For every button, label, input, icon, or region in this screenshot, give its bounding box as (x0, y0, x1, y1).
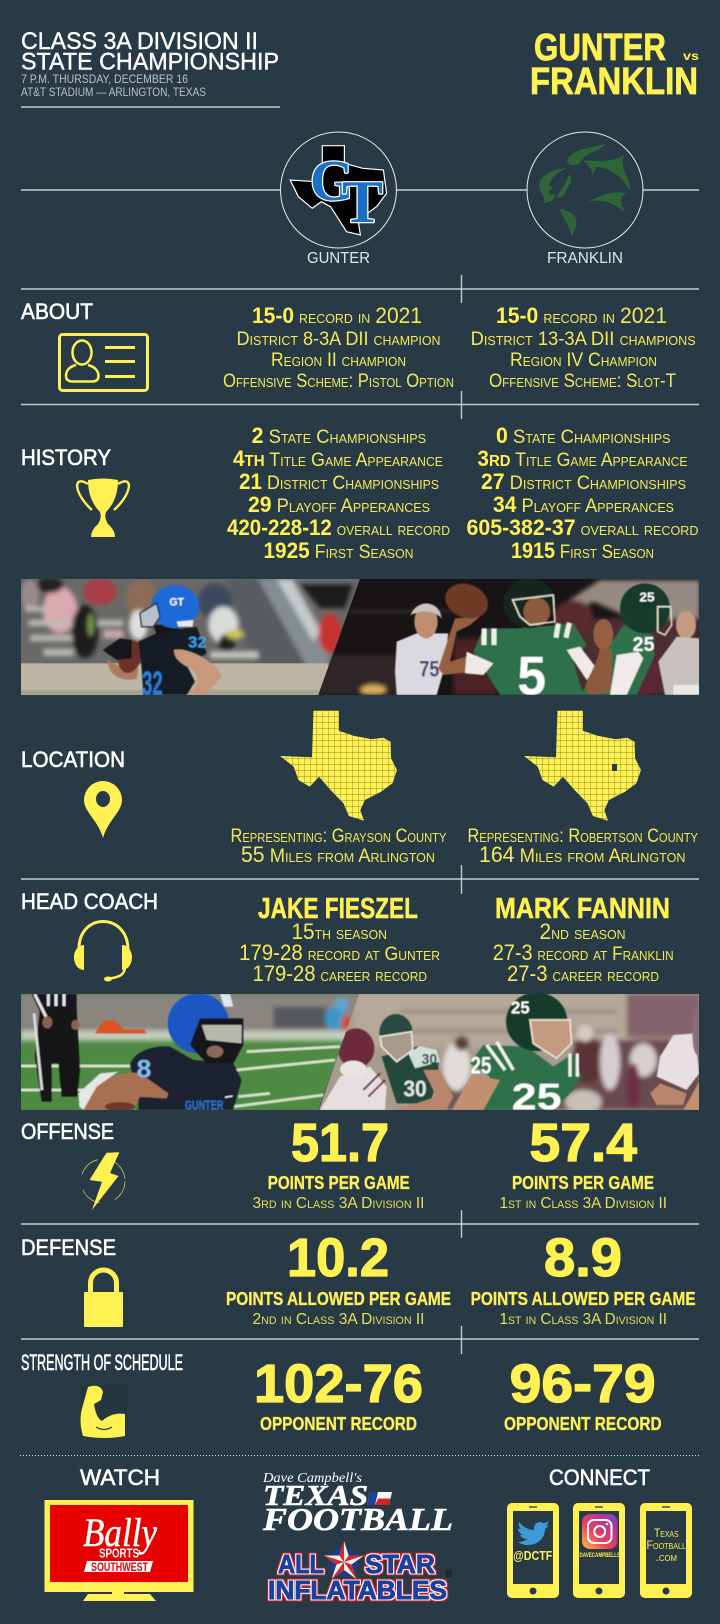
Franklin schedule stats: 96-79 (510, 1354, 656, 1414)
Gunter coach text: 179-28 record at Gunter (239, 940, 440, 965)
panel: strength of schedule (21, 1350, 662, 1438)
Gunter history text: 4TH Title Game Appearance (233, 446, 443, 471)
header: matchup: vs (683, 49, 699, 63)
Franklin offense stats: 1st in Class 3A Division II (500, 1195, 667, 1212)
Franklin coach text: 2nd season (540, 919, 626, 944)
icon: phone with website: .com (656, 1550, 677, 1564)
photo: Gunter receiver: 8 (137, 1055, 151, 1083)
photo: Franklin ball carrier (317, 992, 702, 1117)
Gunter offense stats (252, 1113, 424, 1212)
panel: location (21, 710, 698, 867)
team: Gunter logo: G (310, 148, 354, 213)
Franklin location text (468, 826, 698, 867)
header: matchup: FRANKLIN (530, 61, 698, 103)
Gunter location text: Representing: Grayson County (230, 826, 447, 847)
panel: defense: DEFENSE (21, 1235, 116, 1260)
Gunter defense stats: 2nd in Class 3A Division II (252, 1311, 424, 1328)
logo: Dave Campbell's Texas Football (262, 1471, 453, 1537)
photo: Gunter runner (20, 577, 360, 702)
photo: Gunter runner: 32 (188, 635, 207, 652)
Gunter about text: District 8-3A DII champion (236, 329, 440, 350)
Gunter about text: 15-0 record in 2021 (252, 303, 422, 328)
logo: Dave Campbell's Texas Football: FOOTBALL (262, 1501, 453, 1537)
header: matchup (530, 27, 699, 103)
panel: defense (21, 1228, 696, 1328)
icon: phone with website (640, 1503, 692, 1598)
Franklin offense stats (500, 1113, 667, 1212)
Franklin history text: 0 State Championships (496, 423, 671, 448)
Franklin schedule stats: OPPONENT RECORD (504, 1414, 662, 1434)
panel: connect: CONNECT (549, 1465, 650, 1490)
Franklin history text (466, 423, 698, 563)
team: Franklin logo (527, 132, 643, 267)
logo: All Star Inflatables: INFLATABLES (268, 1575, 447, 1605)
team: Gunter logo (280, 132, 396, 267)
Gunter coach text: JAKE FIESZEL (258, 893, 418, 925)
header: game title: 7 P.M. THURSDAY, DECEMBER 16 (21, 72, 188, 86)
Gunter history text (227, 423, 450, 563)
photo: Franklin quarterback: 25 (639, 591, 655, 605)
team: Franklin logo: FRANKLIN (547, 250, 623, 267)
panel: strength of schedule: STRENGTH OF SCHEDULE (21, 1350, 183, 1375)
panel: about (21, 299, 696, 392)
icon: flexed arm (80, 1385, 127, 1438)
logo: Dave Campbell's Texas Football: Dave Campbell's (262, 1471, 363, 1486)
logo: Dave Campbell's Texas Football: TEXAS (263, 1481, 368, 1512)
panel: connect (507, 1465, 692, 1598)
Gunter location text: 55 Miles from Arlington (241, 842, 435, 867)
icon: map pin (84, 781, 122, 838)
panel: history (21, 423, 698, 563)
Franklin coach text (493, 893, 674, 986)
icon: television with Bally Sports Southwest: SOUTHWEST (91, 1560, 148, 1574)
photo: Gunter runner: GT (169, 597, 184, 609)
photo: Franklin ball carrier: 25 (511, 997, 530, 1017)
Gunter about text (223, 303, 454, 392)
panel: location: LOCATION (21, 747, 125, 772)
Gunter defense stats: 10.2 (287, 1228, 389, 1288)
photo: Gunter receiver: GUNTER (185, 1098, 223, 1112)
Franklin defense stats: 1st in Class 3A Division II (500, 1311, 667, 1328)
map: Texas, Robertson County (524, 710, 642, 822)
icon: phone with website: Football (646, 1538, 686, 1552)
photo: Franklin quarterback (318, 579, 699, 695)
Gunter offense stats: 51.7 (291, 1113, 389, 1173)
panel: about: ABOUT (21, 299, 93, 324)
Franklin offense stats: 57.4 (530, 1113, 637, 1173)
Gunter schedule stats: 102-76 (254, 1354, 423, 1414)
panel: watch: WATCH (80, 1465, 160, 1490)
photo: Franklin quarterback: 25 (633, 634, 655, 656)
Gunter history text: 1925 First Season (264, 538, 414, 563)
icon: phone with Twitter handle: @DCTF (513, 1548, 552, 1563)
photo: Franklin ball carrier: 25 (512, 1076, 562, 1117)
icon: television with Bally Sports Southwest: SPORTS (99, 1546, 139, 1560)
Gunter defense stats (226, 1228, 451, 1328)
Franklin offense stats: POINTS PER GAME (512, 1173, 654, 1193)
photo: Gunter runner: 32 (142, 665, 163, 702)
logo: All Star Inflatables (268, 1541, 453, 1605)
Gunter offense stats: POINTS PER GAME (268, 1173, 410, 1193)
photo banner 1: Gunter and Franklin players (21, 579, 699, 695)
Franklin schedule stats (504, 1354, 662, 1434)
Franklin history text: 34 Playoff Apperances (493, 492, 674, 517)
photo: Franklin quarterback: 5 (517, 644, 546, 706)
Gunter schedule stats: OPPONENT RECORD (260, 1414, 417, 1434)
team: Gunter logo: GUNTER (307, 250, 370, 267)
logo: All Star Inflatables: STAR (365, 1549, 435, 1579)
icon: id card (60, 334, 148, 390)
header: game title: AT&T STADIUM — ARLINGTON, TEXAS (21, 85, 206, 99)
Franklin coach text: MARK FANNIN (495, 893, 670, 925)
Gunter history text: 29 Playoff Apperances (248, 492, 430, 517)
Franklin defense stats (471, 1228, 696, 1328)
header: game title: CLASS 3A DIVISION II (21, 28, 258, 55)
Franklin history text: 27 District Championships (481, 469, 686, 494)
Franklin history text: 1915 First Season (511, 538, 654, 563)
panel: watch (44, 1465, 194, 1601)
Gunter about text: Offensive Scheme: Pistol Option (223, 371, 454, 392)
Gunter defense stats: POINTS ALLOWED PER GAME (226, 1289, 451, 1309)
Franklin history text: 3RD Title Game Appearance (478, 446, 688, 471)
Gunter location text (230, 826, 447, 867)
panel: history: HISTORY (21, 445, 111, 470)
Franklin about text: Region IV Champion (510, 350, 657, 371)
photo: Gunter receiver (20, 993, 360, 1112)
Gunter coach text: 15th season (292, 919, 387, 944)
header: matchup: GUNTER (534, 27, 666, 69)
Franklin history text: 605-382-37 overall record (466, 515, 698, 540)
icon: phone with website: Texas (654, 1526, 679, 1540)
Gunter history text: 21 District Championships (239, 469, 439, 494)
icon: headset (74, 922, 132, 982)
Gunter history text: 2 State Championships (252, 423, 426, 448)
icon: phone with Instagram handle (573, 1503, 625, 1598)
panel: head coach (21, 889, 674, 986)
photo: Franklin ball carrier: 30 (422, 1052, 437, 1068)
Franklin about text (471, 303, 696, 392)
Gunter about text: Region II champion (271, 350, 406, 371)
Gunter coach text: 179-28 career record (252, 961, 427, 986)
team: Gunter logo: T (342, 169, 383, 235)
panel: offense (21, 1113, 667, 1212)
logo: All Star Inflatables: ® (445, 1569, 453, 1580)
Gunter offense stats: 3rd in Class 3A Division II (252, 1195, 424, 1212)
Franklin defense stats: 8.9 (544, 1228, 622, 1288)
header: game title (21, 28, 280, 107)
Franklin about text: District 13-3A DII champions (471, 329, 696, 350)
Gunter history text: 420-228-12 overall record (227, 515, 450, 540)
icon: phone with Twitter handle (507, 1503, 559, 1598)
Franklin location text: 164 Miles from Arlington (479, 842, 686, 867)
icon: television with Bally Sports Southwest (44, 1500, 194, 1601)
icon: television with Bally Sports Southwest: Bally (83, 1510, 157, 1555)
Franklin about text: 15-0 record in 2021 (496, 303, 667, 328)
panel: head coach: HEAD COACH (21, 889, 158, 914)
Franklin about text: Offensive Scheme: Slot-T (489, 371, 676, 392)
icon: trophy (77, 478, 129, 537)
map: Texas, Grayson County (280, 710, 398, 822)
header: game title: STATE CHAMPIONSHIP (21, 48, 279, 76)
photo: Franklin quarterback: 75 (419, 657, 439, 682)
logo: All Star Inflatables: ALL (278, 1549, 324, 1579)
icon: padlock (84, 1270, 123, 1327)
panel: offense: OFFENSE (21, 1119, 114, 1144)
Franklin coach text: 27-3 record at Franklin (493, 940, 674, 965)
photo: Franklin ball carrier: 25 (471, 1052, 491, 1079)
photo banner 2: Gunter and Franklin players (20, 992, 702, 1117)
Gunter coach text (239, 893, 440, 986)
icon: lightning bolt (81, 1152, 125, 1210)
icon: phone with Instagram handle: DAVECAMPBELLS (580, 1553, 620, 1559)
photo: Franklin ball carrier: 30 (403, 1076, 427, 1102)
Franklin coach text: 27-3 career record (507, 961, 659, 986)
